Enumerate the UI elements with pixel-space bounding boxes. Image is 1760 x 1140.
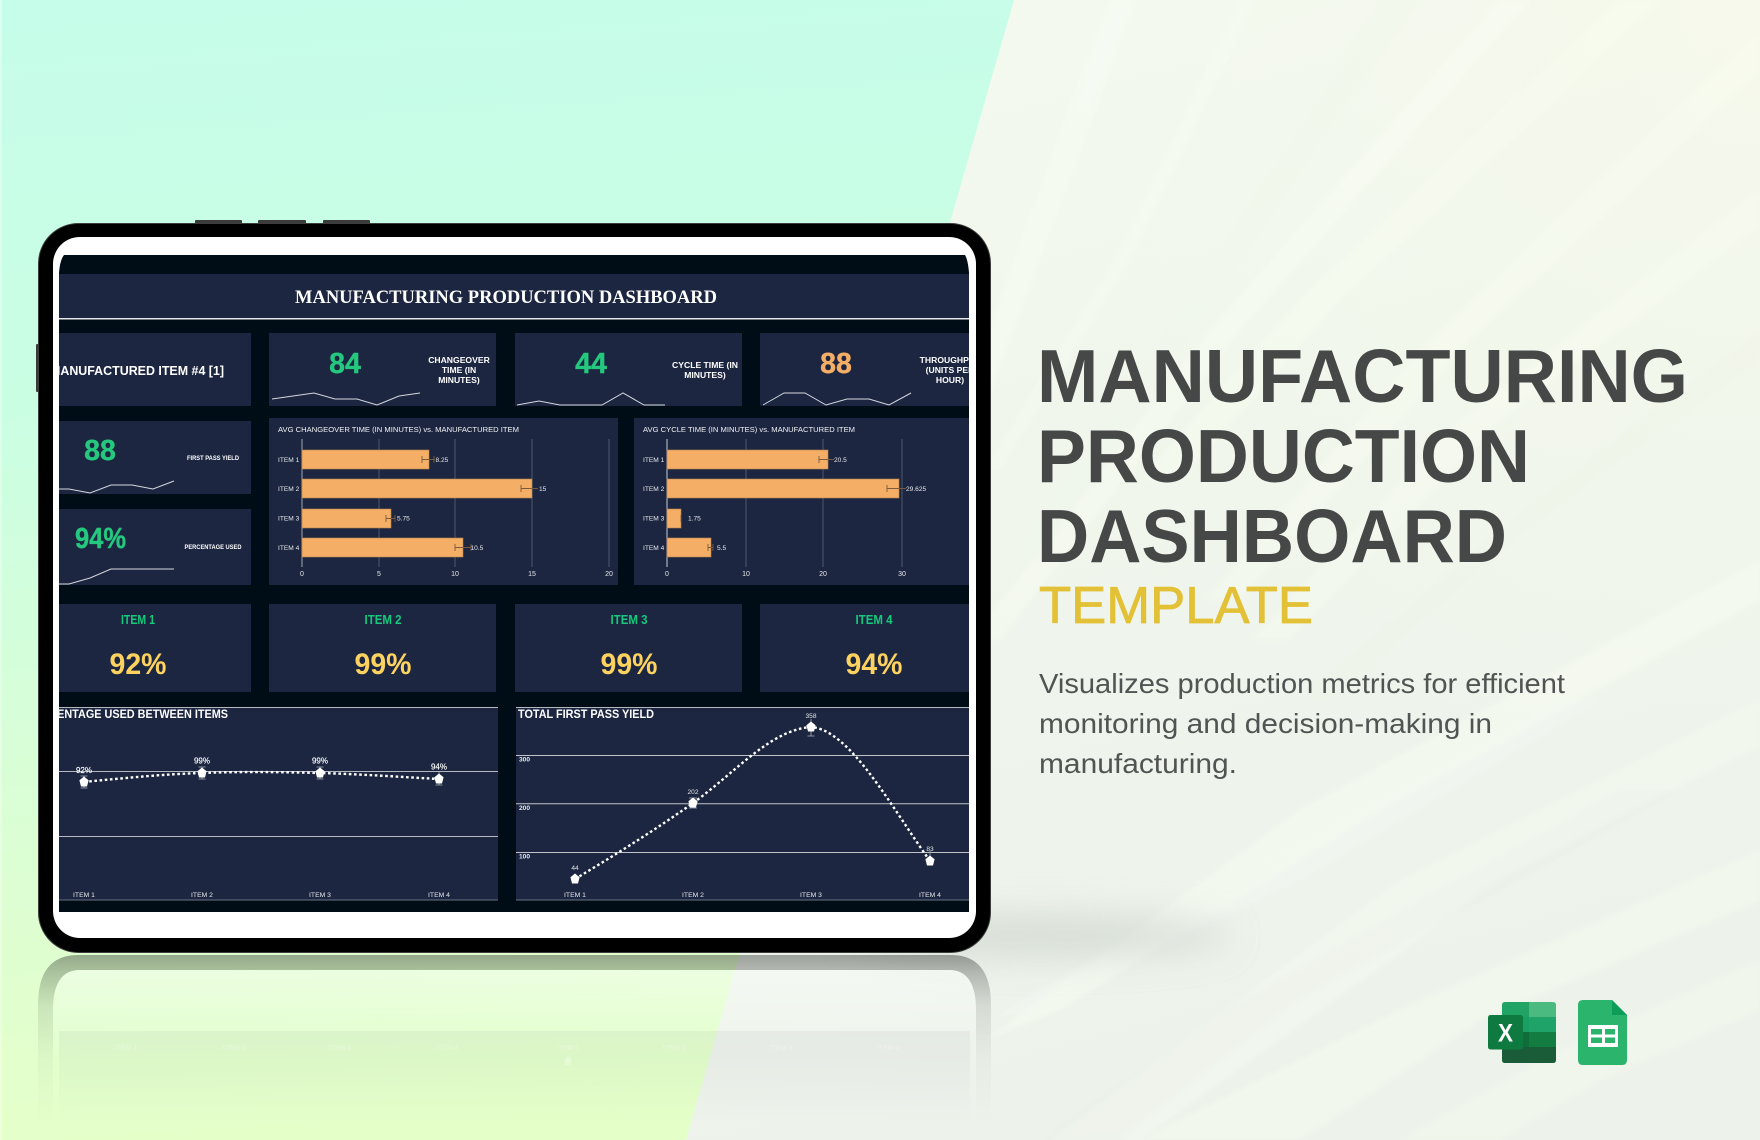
background: mint to lime panel with pale streaked panel: [0, 0, 1014, 1140]
panel: throughput KPI: THROUGHPUT: [920, 355, 981, 365]
bar chart: avg changeover time: [269, 418, 618, 585]
panel: first pass yield KPI: FIRST PASS YIELD: [187, 455, 239, 462]
bar chart: avg cycle time: 0: [665, 571, 669, 578]
panel: throughput KPI: 88: [820, 348, 852, 380]
description text: Visualizes production metrics for efficient: [1039, 668, 1565, 699]
panel: first pass yield KPI: [59, 421, 251, 494]
line chart: percentage used between items: ITEM 4: [428, 892, 450, 899]
dashboard screen: [22, 255, 987, 912]
line chart: percentage used between items: 94%: [431, 762, 447, 772]
tablet reflection: ITEM 4: [877, 1045, 899, 1052]
tablet reflection: ITEM 1: [557, 1045, 579, 1052]
panel: cycle time KPI: CYCLE TIME (IN: [672, 360, 738, 370]
bar chart: avg changeover time: ITEM 4: [278, 545, 300, 552]
tablet white bezel: [53, 237, 976, 938]
line chart: percentage used between items: ITEM 1: [73, 892, 95, 899]
panel: item 4 percentage: [760, 604, 987, 692]
line chart: percentage used between items: 92%: [76, 766, 92, 775]
line chart: total first pass yield: TOTAL FIRST PASS YIELD: [518, 707, 654, 721]
title: DASHBOARD: [1037, 494, 1507, 578]
bar chart: avg changeover time: 20: [605, 571, 613, 578]
tablet device: [22, 220, 990, 952]
bar chart: avg changeover time: ITEM 1: [278, 457, 300, 464]
icon: top hardware buttons: [36, 220, 370, 392]
line chart: total first pass yield: ITEM 2: [682, 892, 704, 899]
bar chart: avg cycle time: ITEM 2: [643, 486, 665, 493]
bar chart: avg changeover time: AVG CHANGEOVER TIME (IN MINUTES) vs. MANUFACTURED ITEM: [278, 425, 519, 434]
line chart: total first pass yield: ITEM 1: [564, 892, 586, 899]
bar chart: avg changeover time: 15: [539, 486, 547, 493]
title: PRODUCTION: [1037, 414, 1530, 498]
line chart: total first pass yield: ITEM 4: [919, 892, 941, 899]
panel: cycle time KPI: [515, 333, 742, 406]
icon: excel: [1488, 1002, 1556, 1063]
bar chart: avg cycle time: 30: [898, 571, 906, 578]
description text: monitoring and decision-making in: [1039, 708, 1492, 739]
title: MANUFACTURING: [1037, 334, 1688, 418]
panel: item 3 percentage: [515, 604, 742, 692]
panel: selected item: [59, 333, 251, 406]
icon: google sheets: [1578, 1000, 1627, 1065]
line chart: percentage used between items: 99%: [312, 756, 328, 766]
line chart: total first pass yield: 300: [519, 756, 530, 764]
bar chart: avg changeover time: 8.25: [436, 457, 449, 464]
panel: changeover time KPI: 84: [329, 348, 361, 380]
icon: excel: X: [1498, 1020, 1513, 1048]
panel: item 4 percentage: ITEM 4: [856, 613, 893, 627]
panel: changeover time KPI: TIME (IN: [442, 365, 476, 375]
panel: item 4 percentage: 94%: [846, 648, 902, 681]
tablet reflection: ITEM 2: [223, 1045, 245, 1052]
panel: first pass yield KPI: 88: [84, 435, 116, 467]
dashboard header: MANUFACTURING PRODUCTION DASHBOARD: [295, 287, 717, 308]
line chart: total first pass yield: 44: [571, 865, 579, 872]
panel: throughput KPI: (UNITS PER: [926, 365, 975, 375]
panel: throughput KPI: [760, 333, 987, 406]
bar chart: avg changeover time: 15: [528, 571, 536, 578]
line chart: total first pass yield: [516, 707, 976, 900]
line chart: total first pass yield: 83: [926, 846, 934, 853]
line chart: percentage used between items: ITEM 2: [191, 892, 213, 899]
tablet reflection: ITEM 1: [115, 1045, 137, 1052]
shadow behind tablet on right: [850, 916, 1230, 956]
line chart: total first pass yield: 202: [687, 789, 699, 796]
tablet reflection: ITEM 2: [663, 1045, 685, 1052]
panel: cycle time KPI: 44: [575, 348, 607, 380]
description text: manufacturing.: [1039, 748, 1237, 779]
title: [1037, 334, 1688, 578]
bar chart: avg changeover time: 5.75: [397, 516, 410, 522]
bar chart: avg changeover time: 5: [377, 571, 381, 578]
line chart: percentage used between items: ITEM 3: [309, 892, 331, 899]
line chart: percentage used between items: 99%: [194, 756, 210, 766]
panel: changeover time KPI: [269, 333, 496, 406]
panel: item 2 percentage: [269, 604, 496, 692]
panel: item 1 percentage: ITEM 1: [121, 613, 155, 627]
bar chart: avg cycle time: ITEM 4: [643, 545, 665, 552]
panel: item 1 percentage: 92%: [110, 648, 166, 681]
dashboard header: [59, 274, 969, 320]
panel: percentage used KPI: PERCENTAGE USED: [184, 544, 242, 551]
panel: changeover time KPI: MINUTES): [438, 375, 480, 385]
line chart: percentage used between items: [22, 707, 498, 900]
bar chart: avg changeover time: 0: [300, 571, 304, 578]
subtitle: TEMPLATE: [1039, 577, 1313, 635]
bar chart: avg changeover time: 10: [451, 571, 459, 578]
panel: changeover time KPI: CHANGEOVER: [428, 355, 491, 365]
panel: item 2 percentage: 99%: [354, 648, 412, 681]
bar chart: avg cycle time: 5.5: [717, 545, 726, 552]
bar chart: avg cycle time: ITEM 1: [643, 457, 665, 464]
bar chart: avg cycle time: 1.75: [688, 516, 701, 522]
tablet reflection: ITEM 3: [770, 1045, 792, 1052]
line chart: total first pass yield: ITEM 3: [800, 892, 822, 899]
panel: item 3 percentage: ITEM 3: [610, 613, 648, 627]
panel: item 1 percentage: [59, 604, 251, 692]
bar chart: avg cycle time: 20.5: [834, 457, 847, 464]
panel: percentage used KPI: 94%: [75, 523, 126, 555]
bar chart: avg cycle time: 10: [742, 571, 750, 578]
bar chart: avg changeover time: 10.5: [470, 545, 484, 552]
bar chart: avg cycle time: [634, 418, 974, 585]
tablet reflection: ITEM 3: [329, 1045, 351, 1052]
panel: cycle time KPI: MINUTES): [684, 370, 726, 380]
bar chart: avg cycle time: 29.625: [906, 486, 927, 493]
line chart: percentage used between items: PERCENTAGE USED BETWEEN ITEMS: [27, 707, 228, 721]
line chart: total first pass yield: 100: [519, 854, 530, 860]
panel: throughput KPI: HOUR): [936, 375, 964, 385]
panel: item 2 percentage: ITEM 2: [364, 613, 402, 627]
bar chart: avg changeover time: ITEM 3: [278, 516, 300, 522]
tablet reflection: ITEM 4: [436, 1045, 458, 1052]
line chart: total first pass yield: 358: [805, 713, 817, 720]
panel: percentage used KPI: [59, 509, 251, 585]
bar chart: avg cycle time: AVG CYCLE TIME (IN MINUTES) vs. MANUFACTURED ITEM: [643, 425, 855, 434]
tablet body: [38, 224, 990, 952]
description text: [1039, 668, 1565, 779]
bar chart: avg cycle time: 20: [819, 571, 827, 578]
tablet reflection: [38, 955, 991, 1130]
bar chart: avg cycle time: ITEM 3: [643, 516, 665, 522]
panel: item 3 percentage: 99%: [600, 648, 658, 681]
line chart: total first pass yield: 200: [519, 805, 530, 812]
bar chart: avg changeover time: ITEM 2: [278, 486, 300, 493]
panel: selected item: MANUFACTURED ITEM #4 [1]: [50, 363, 224, 378]
